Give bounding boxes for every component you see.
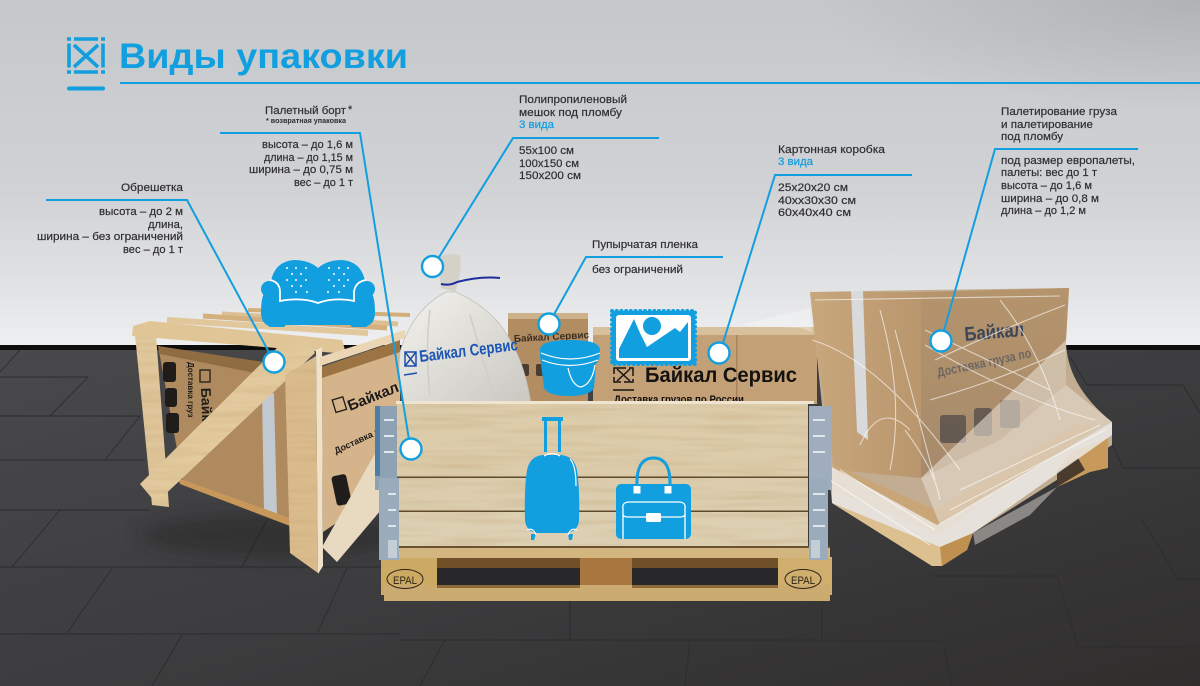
palletizing specs: под размер европалеты,	[1001, 155, 1135, 167]
sack tie	[441, 278, 500, 285]
palletizing specs: высота – до 1,6 м	[1001, 180, 1092, 192]
wrapped box: left face	[810, 292, 922, 478]
sack sizes: 100х150 см	[519, 158, 579, 170]
title rule	[120, 82, 1200, 84]
palletizing heading	[1001, 106, 1118, 143]
palletizing specs	[1001, 155, 1135, 217]
wrapped box: print	[936, 319, 1033, 443]
pallet	[381, 557, 832, 601]
box heading: Картонная коробка	[778, 144, 886, 156]
sack	[399, 254, 531, 404]
small cardboard box: Байкал Сервис	[514, 330, 590, 345]
box marker	[708, 342, 730, 364]
collar specs: высота – до 1,6 м	[262, 139, 353, 151]
crate: front right brace	[322, 450, 381, 562]
collar specs: длина – до 1,15 м	[264, 152, 353, 164]
sack heading: Полипропиленовый	[519, 94, 627, 106]
callout: cardboard box	[708, 144, 912, 364]
icon: picture stamp	[612, 311, 695, 364]
wrapped box: print: Доставка груза по	[936, 345, 1033, 380]
wrapped pallet silhouette	[810, 288, 1112, 566]
palletizing marker	[930, 330, 952, 352]
collar boards	[380, 401, 830, 558]
icon: handbag	[616, 458, 691, 539]
collar heading: Палетный борт	[265, 105, 346, 117]
icon: suitcase	[525, 417, 579, 540]
crate: front box face	[320, 330, 415, 532]
crate specs: ширина – без ограничений	[37, 231, 183, 243]
box leader	[722, 175, 912, 346]
pallet: EPAL	[791, 575, 815, 587]
box logo	[613, 368, 634, 390]
icon: sofa	[261, 260, 375, 327]
crate: cardboard box side	[158, 346, 290, 520]
sack sizes: 150х200 см	[519, 170, 581, 182]
film wrap layers	[812, 296, 1112, 547]
pallet collar on pallet	[375, 401, 832, 601]
wrapped box: right face	[921, 288, 1069, 478]
crate specs: вес – до 1 т	[123, 244, 183, 256]
palletizing heading: под пломбу	[1001, 131, 1064, 143]
pallet: EPAL	[393, 575, 417, 587]
box sizes: 25х20х20 см	[778, 182, 848, 194]
box heading: 3 вида	[778, 156, 814, 168]
sack logo	[404, 352, 417, 375]
film fan behind	[740, 308, 812, 332]
callout: crate	[37, 182, 284, 372]
wrapped box: tape	[851, 291, 868, 440]
sack marker	[422, 256, 443, 277]
box heading	[778, 144, 886, 168]
crate: cardboard box side: Доставка груз	[186, 362, 195, 417]
large cardboard box	[593, 327, 817, 406]
sack brand text: Байкал Сервис	[418, 336, 519, 366]
crate: bottom rail	[178, 478, 290, 526]
sack sizes: 55х100 см	[519, 145, 574, 157]
title: Виды упаковки	[119, 37, 408, 76]
large cardboard box: Доставка грузов по России	[614, 394, 744, 406]
crate specs	[37, 206, 183, 256]
collar asterisk: *	[348, 104, 353, 116]
floor with tile seams	[0, 345, 1200, 686]
bubble wrap spec: без ограничений	[592, 264, 683, 276]
logo	[67, 39, 105, 88]
collar marker	[400, 438, 422, 460]
sack leader	[436, 138, 659, 262]
callout: palletizing	[930, 106, 1138, 352]
header	[67, 37, 1200, 88]
sack heading	[519, 94, 627, 131]
crate specs: длина,	[148, 219, 183, 231]
wall background	[0, 0, 1200, 346]
palletizing specs: ширина – до 0,8 м	[1001, 193, 1099, 205]
sack heading: мешок под пломбу	[519, 107, 623, 119]
bubble wrap leader	[552, 257, 723, 318]
palletizing specs: палеты: вес до 1 т	[1001, 167, 1097, 179]
wooden crate with box	[132, 310, 415, 574]
palletizing heading: Палетирование груза	[1001, 106, 1118, 118]
palletizing heading: и палетирование	[1001, 119, 1093, 131]
left metal hinge	[375, 406, 399, 560]
crate: back top slats	[167, 310, 410, 333]
crate marker	[264, 352, 284, 372]
crate: front post	[285, 356, 318, 573]
crate leader	[46, 200, 272, 358]
small cardboard box	[508, 313, 590, 403]
box brand text: Байкал Сервис	[645, 364, 797, 387]
bubble wrap marker	[538, 314, 560, 334]
crate: cardboard box side: Байкал	[198, 388, 216, 438]
crate: top front rail	[132, 321, 345, 353]
collar specs: вес – до 1 т	[294, 177, 353, 189]
crate: front box face: Байкал С	[345, 373, 415, 415]
collar specs: ширина – до 0,75 м	[249, 164, 353, 176]
callout: pallet collar	[220, 104, 422, 460]
palletizing leader	[943, 149, 1138, 334]
wrapped pallet base	[832, 425, 1108, 566]
palletizing specs: длина – до 1,2 м	[1001, 205, 1086, 217]
box sizes: 60х40х40 см	[778, 207, 851, 219]
collar footnote: * возвратная упаковка	[266, 118, 346, 125]
crate shadow	[140, 513, 400, 557]
box sizes	[778, 182, 856, 219]
icon: bubble wrap bucket	[540, 340, 600, 396]
EPAL marks	[387, 570, 821, 588]
collar specs	[249, 139, 353, 189]
crate: front box face: Доставка гр	[333, 424, 385, 456]
crate: left post	[135, 335, 169, 507]
bubble wrap heading: Пупырчатая пленка	[592, 239, 699, 251]
sack sizes	[519, 145, 581, 182]
crate: side diagonal brace	[140, 342, 315, 503]
crate heading: Обрешетка	[121, 182, 184, 194]
box sizes: 40хх30х30 см	[778, 195, 856, 207]
right metal hinge	[809, 406, 831, 560]
callout: polypropylene sack	[422, 94, 659, 277]
crate specs: высота – до 2 м	[99, 206, 183, 218]
callout: bubble wrap	[538, 239, 723, 334]
wrapped pallet	[740, 288, 1112, 566]
collar leader	[220, 133, 410, 446]
wrapped box: print: Байкал	[964, 319, 1025, 346]
sack heading: 3 вида	[519, 119, 555, 131]
